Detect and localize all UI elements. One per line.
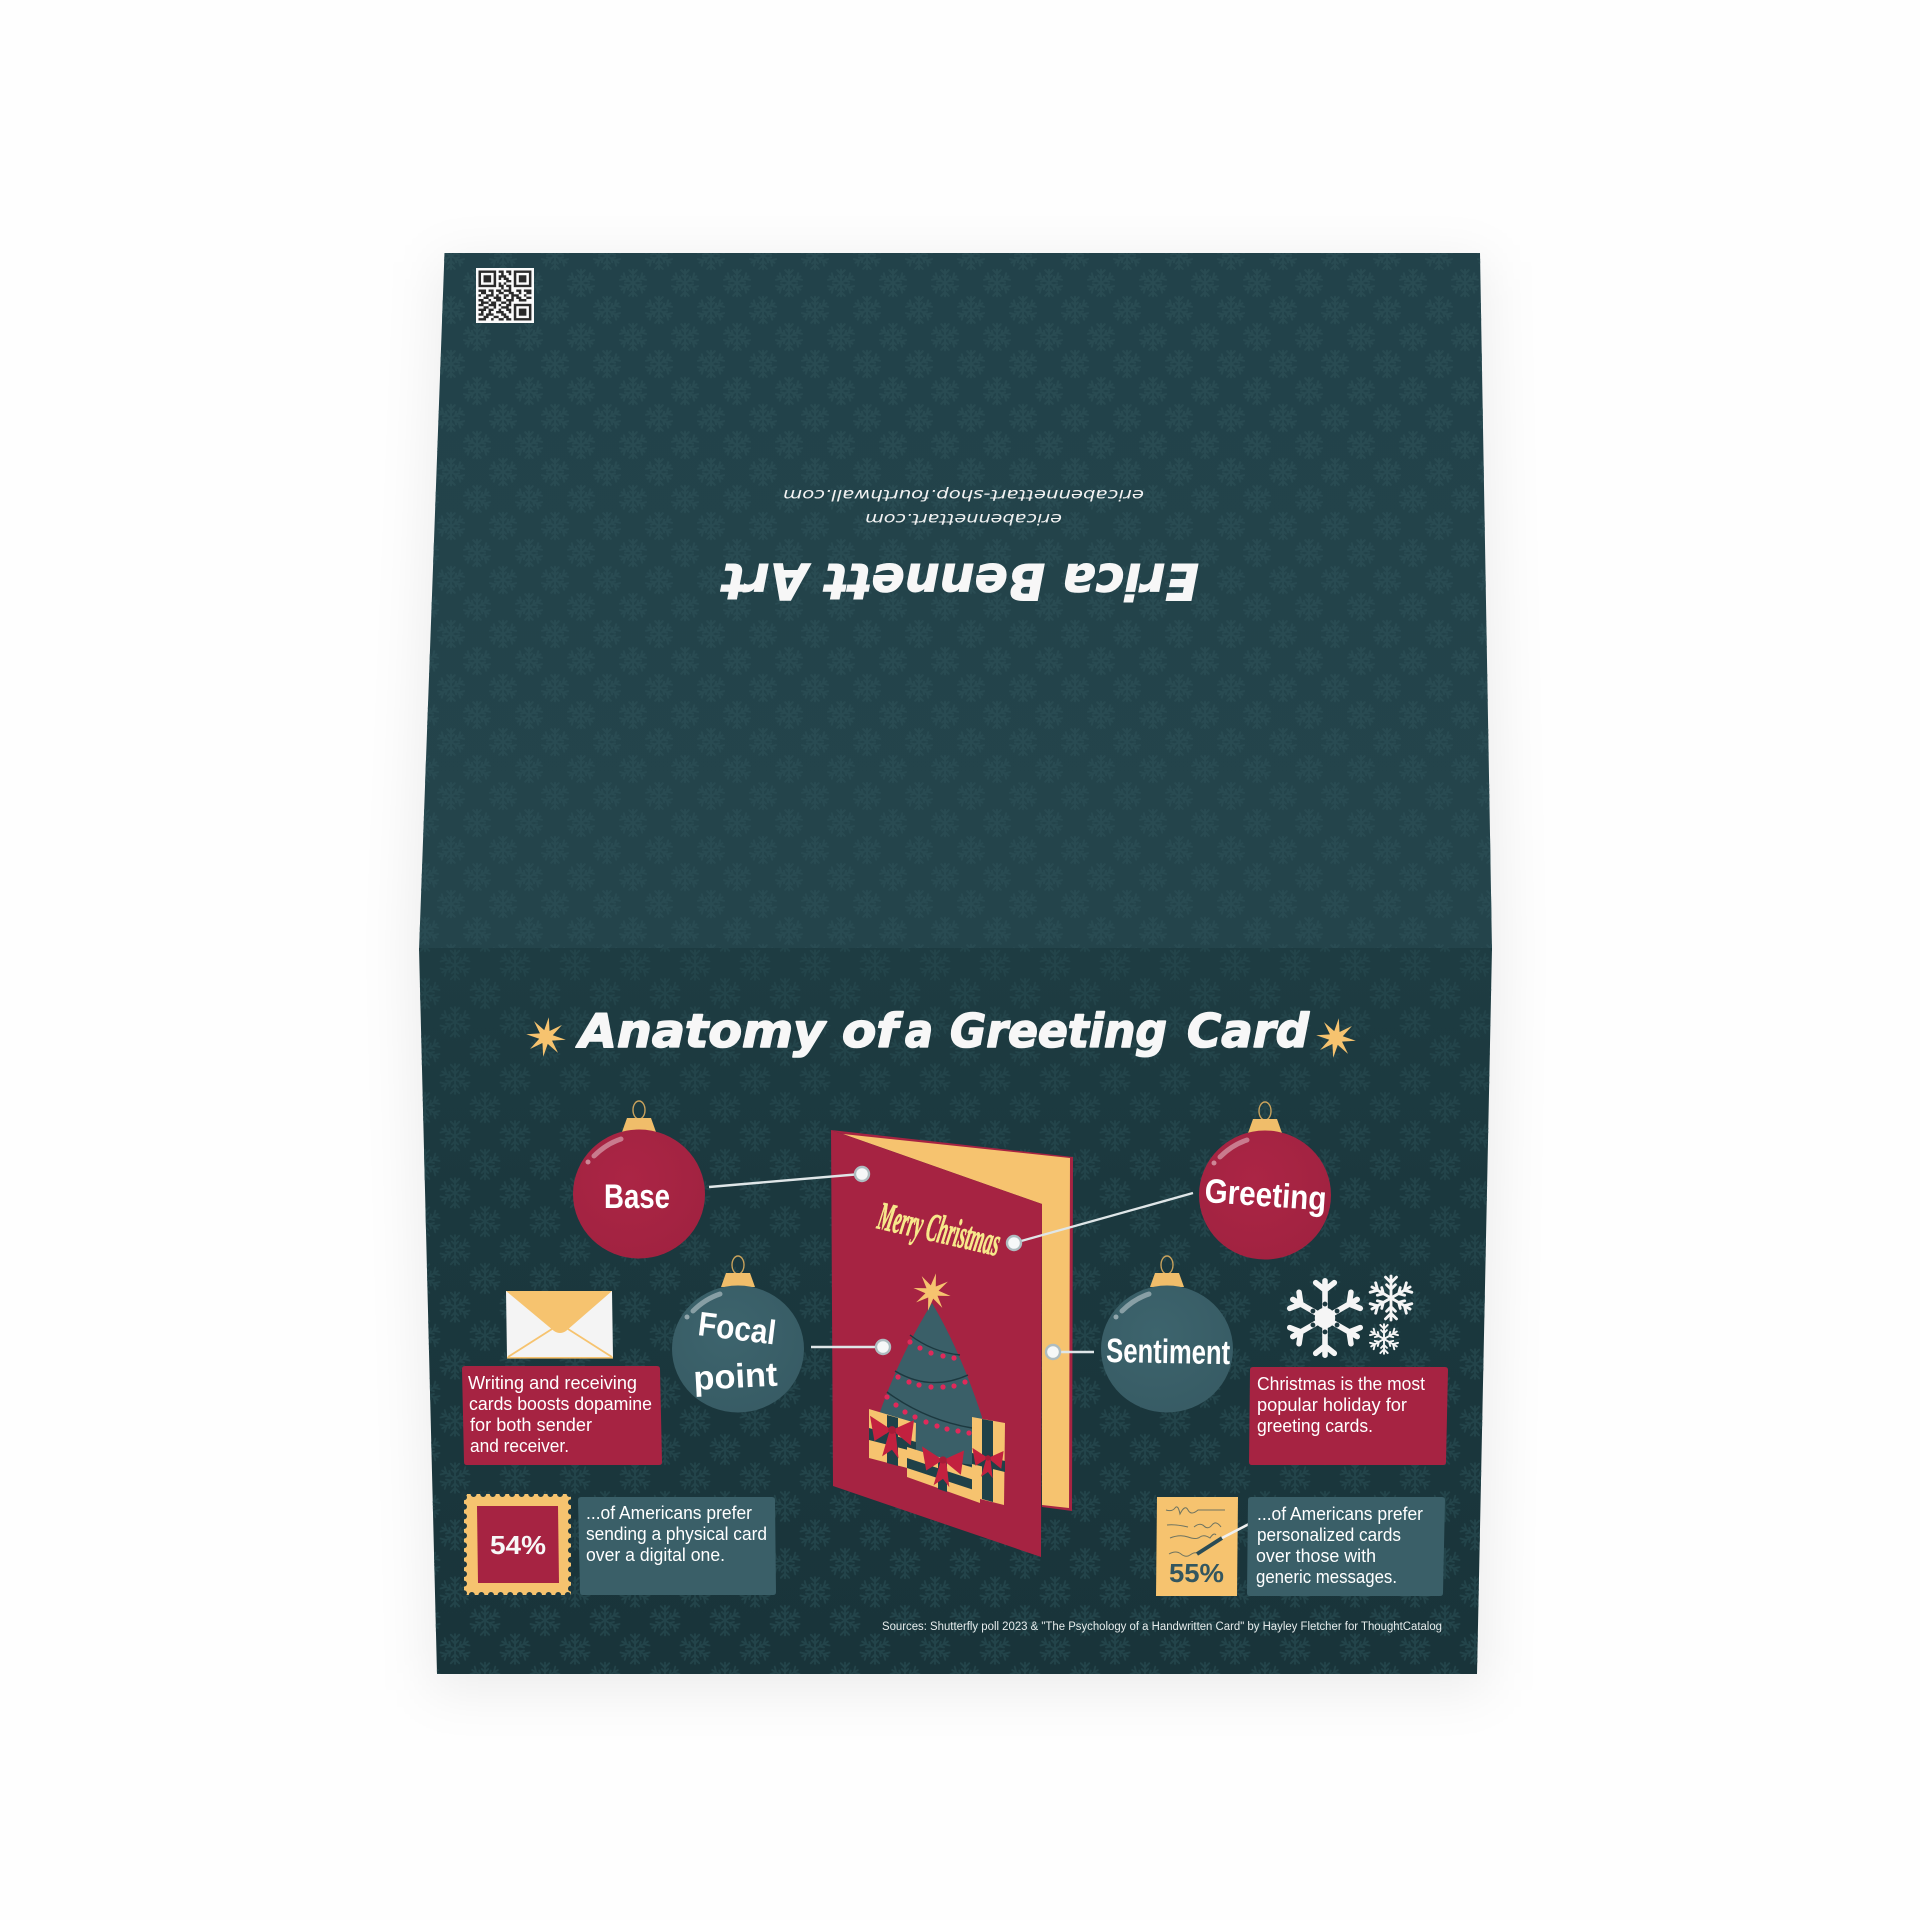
gift: right [972,1417,1005,1505]
ornament: Greeting [1199,1102,1331,1260]
callout: Christmas fact [1249,1367,1448,1465]
panel: inside of card (bottom flap) [419,948,1492,1674]
callout: Christmas fact: Christmas is the most [1257,1374,1425,1394]
panel: back of card (top flap) [419,253,1492,951]
icon: envelope [506,1291,613,1359]
callout: Base line [709,1167,869,1187]
ornament: Base: Base [604,1178,670,1216]
title: a [905,1004,933,1058]
title: Anatomy [576,1004,827,1058]
callout: 55% personalized cards: generic messages. [1256,1567,1397,1587]
gift: centre [907,1446,980,1503]
ornament: Focal point: Focal [696,1305,778,1352]
callout: 55% personalized cards: personalized cards [1257,1525,1401,1545]
ornament: Greeting: Greeting [1203,1172,1328,1218]
upside-down brand name: Erica Bennett Art [720,552,1199,610]
callout: 54% physical card: sending a physical card [586,1524,767,1544]
title [576,1004,1310,1058]
tree [880,1269,982,1472]
callout: dopamine fact: Writing and receiving [468,1373,637,1393]
callout: Greeting line [1007,1193,1193,1250]
ornament: Sentiment: Sentiment [1106,1332,1231,1372]
icon: handwritten note 55% [1156,1497,1249,1596]
title: Greeting [950,1004,1167,1058]
callout: 54% physical card [578,1497,776,1595]
title: of [842,1004,903,1058]
callout: Christmas fact: popular holiday for [1257,1395,1407,1415]
icon: pen [1197,1524,1249,1554]
callout: 54% physical card: over a digital one. [586,1545,725,1565]
icon: left gold star [523,1014,569,1060]
stamp: 54%: 54% [490,1532,546,1560]
gift: left [869,1409,916,1470]
callout: 54% physical card: ...of Americans prefer [586,1503,752,1523]
sources: Sources: Shutterfly poll 2023 & "The Psychology of a Handwritten Card" by Hayley Fletcher for ThoughtCatalog [882,1621,1442,1633]
callout: dopamine fact [462,1366,662,1465]
callout: dopamine fact: cards boosts dopamine [469,1394,652,1414]
callout: 55% personalized cards [1247,1497,1445,1596]
illustrated greeting card [831,1130,1073,1557]
callout: dopamine fact: and receiver. [470,1436,569,1456]
stamp: 54% [464,1494,571,1595]
icon: snowflakes [1288,1276,1413,1355]
callout: dopamine fact: for both sender [470,1415,592,1435]
callout: Focal point line [811,1340,890,1354]
ornament: Base [573,1101,705,1258]
illustrated greeting card: Merry Christmas [874,1193,1005,1265]
callout: Sentiment line [1046,1345,1094,1359]
icon: right gold star [1313,1015,1359,1061]
upside-down shop URL: ericabennettart-shop.fourthwall.com [783,486,1144,504]
card shadow [412,262,1500,1690]
ornament: Focal point: point [692,1356,778,1398]
ornament: Focal point [672,1256,804,1412]
callout: 55% personalized cards: ...of Americans prefer [1257,1504,1423,1524]
icon: handwritten note 55%: 55% [1169,1558,1224,1588]
title: Card [1187,1004,1310,1058]
ornament: Sentiment [1101,1256,1233,1412]
callout: 55% personalized cards: over those with [1256,1546,1376,1566]
QR code [476,268,534,323]
callout: Christmas fact: greeting cards. [1257,1416,1373,1436]
upside-down website: ericabennettart.com [865,510,1062,528]
